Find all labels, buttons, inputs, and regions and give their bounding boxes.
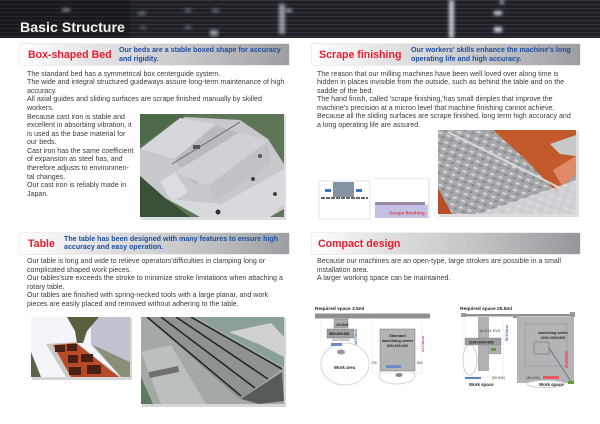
text: bed intro: The wide and integral structured guideways assure long-term maintenance of high — [27, 78, 284, 86]
text: cast iron: Because cast iron is stable and — [27, 112, 125, 120]
photo: bed casting — [140, 114, 286, 220]
text: cast iron — [27, 112, 134, 198]
diagram: layout 25.5 m: (50 kVA) — [492, 376, 505, 380]
text: scrape finishing: Because all the sliding surfaces are scrape finished, long term high accuracy and — [317, 112, 571, 120]
diagram: scrape section: Scrape finishing — [389, 210, 425, 216]
text: bed intro — [27, 70, 284, 112]
label: required space: Required space 25.5ml — [460, 306, 512, 312]
diagram: layout 3.5 m: 800×400×500 — [329, 332, 350, 336]
panel: table — [20, 232, 290, 407]
header band — [0, 0, 600, 38]
panel: box-shaped bed — [20, 44, 290, 220]
text: cast iron: Japan. — [27, 190, 48, 198]
text: scrape finishing: The hand finish, called 'scrape finishing,'has small dimples that improve the — [317, 95, 553, 103]
label: work space: Work space — [539, 382, 564, 387]
subheading: scrape finishing: operating life and high accuracy. — [411, 55, 521, 63]
text: cast iron: Cast iron has the same coefficient — [27, 147, 134, 155]
heading: scrape finishing: Scrape finishing — [319, 49, 401, 61]
text: bed intro: accuracy. — [27, 87, 57, 95]
diagram: layout 25.5 m: 2100×1000×800 — [541, 336, 565, 340]
diagram: layout 3.5 m: 2274mm — [420, 336, 425, 352]
text: cast iron: of expansion as steel has, and — [27, 155, 123, 163]
diagram: layout 3.5 m: 700 — [371, 361, 377, 365]
subheading: table: accuracy and easy operation. — [64, 243, 163, 251]
text: cast iron: therefore adjusts to environmen- — [27, 164, 129, 172]
title: Basic Structure — [20, 20, 125, 36]
label: work area: Work area — [334, 365, 356, 370]
diagram: scrape section — [318, 178, 430, 220]
photo: machining table — [31, 317, 132, 380]
diagram: layout 3.5 m: 800×315×400 — [387, 344, 408, 348]
text: cast iron: Our cast iron is reliably made in — [27, 181, 126, 189]
heading: box-shaped bed: Box-shaped Bed — [28, 49, 112, 61]
text: scrape finishing: saddle of the bed. — [317, 87, 373, 95]
diagram: layout 3.5 m: Standard — [389, 334, 406, 338]
banner: box-shaped bed — [20, 44, 289, 65]
diagram: layout 3.5 m: 1670mm — [353, 329, 358, 345]
diagram: layout 25.5 m: 10.1/14 KVS — [479, 329, 501, 333]
text: table: rotary table. — [27, 283, 64, 291]
label: required space: Required space 3.5ml — [315, 306, 364, 312]
text: scrape finishing: a long operating life are assured. — [317, 121, 420, 129]
text: cast iron: tal changes. — [27, 173, 65, 181]
heading: table: Table — [28, 238, 55, 250]
text: scrape finishing — [317, 70, 571, 129]
heading: compact design: Compact design — [318, 238, 400, 250]
text: scrape finishing: hidden in places invisible from the outside, such as behind the table and on the — [317, 78, 564, 86]
text: bed intro: The standard bed has a symmetrical box centerguide system. — [27, 70, 220, 78]
text: bed intro: All axial guides and sliding surfaces are scrape finished manually by skilled — [27, 95, 262, 103]
text: table: Our tables are finished with spring-necked tools with a large planar, and work — [27, 291, 268, 299]
diagram: layout 3.5 m: machining center — [382, 339, 414, 343]
banner: table — [20, 233, 289, 254]
label: work space: Work space — [469, 382, 494, 387]
photo: scraped surface — [438, 130, 579, 217]
text: cast iron: our beds. — [27, 138, 57, 146]
subheading: box-shaped bed — [119, 46, 281, 63]
photo: T-slot table — [141, 317, 286, 407]
diagram: layout 25.5 m: (36 kVA) — [526, 376, 540, 380]
diagram: layout 25.5 m: 5010mm — [504, 325, 509, 341]
panel: scrape finishing — [312, 44, 580, 220]
text: compact design — [317, 257, 561, 282]
diagram: layout 25.5 m: 2100×1000×800 — [469, 340, 494, 344]
text: cast iron: is used as the base material for — [27, 130, 125, 138]
text: cast iron: excellent in absorbing vibration, it — [27, 121, 132, 129]
diagram: layout 25.5 m: machining center — [538, 331, 568, 335]
text: table: pieces are easily placed and removed without adhering to the table. — [27, 300, 239, 308]
text: scrape finishing: machine's precision at a micron level that machine finishing cannot achieve. — [317, 104, 554, 112]
banner: scrape finishing — [312, 44, 580, 65]
text: bed intro: workers. — [27, 104, 54, 112]
text: scrape finishing: The reason that our milling machines have been well loved over along time is — [317, 70, 559, 78]
subheading: table: The table has been designed with many features to ensure high — [64, 234, 278, 242]
diagram: layout 25.5 m — [460, 306, 575, 388]
diagram: layout 3.5 m — [315, 306, 430, 386]
diagram: layout 3.5 m: 15.6kW — [336, 323, 349, 327]
text: table: complicated shaped work pieces. — [27, 266, 131, 274]
diagram: layout 3.5 m: 500 — [417, 361, 423, 365]
banner: compact design — [312, 233, 580, 254]
text: table — [27, 257, 283, 308]
subheading: table — [64, 234, 278, 251]
text: compact design: installation area. — [317, 266, 369, 274]
text: table: Our table is long and wide to relieve operators'difficulties in clamping long or — [27, 257, 265, 265]
text: compact design: Because our machines are an open-type, large strokes are possible in a small — [317, 257, 561, 265]
text: table: Our tables'size exceeds the stroke to minimize stroke limitations when attaching a — [27, 274, 283, 282]
subheading: scrape finishing — [411, 46, 571, 63]
text: compact design: A larger working space can be maintained. — [317, 274, 450, 282]
subheading: box-shaped bed: Our beds are a stable boxed shape for accuracy — [119, 46, 281, 54]
subheading: scrape finishing: Our workers' skills enhance the machine's long — [411, 46, 571, 54]
subheading: box-shaped bed: and rigidity. — [119, 55, 159, 63]
panel: compact design — [312, 232, 580, 282]
